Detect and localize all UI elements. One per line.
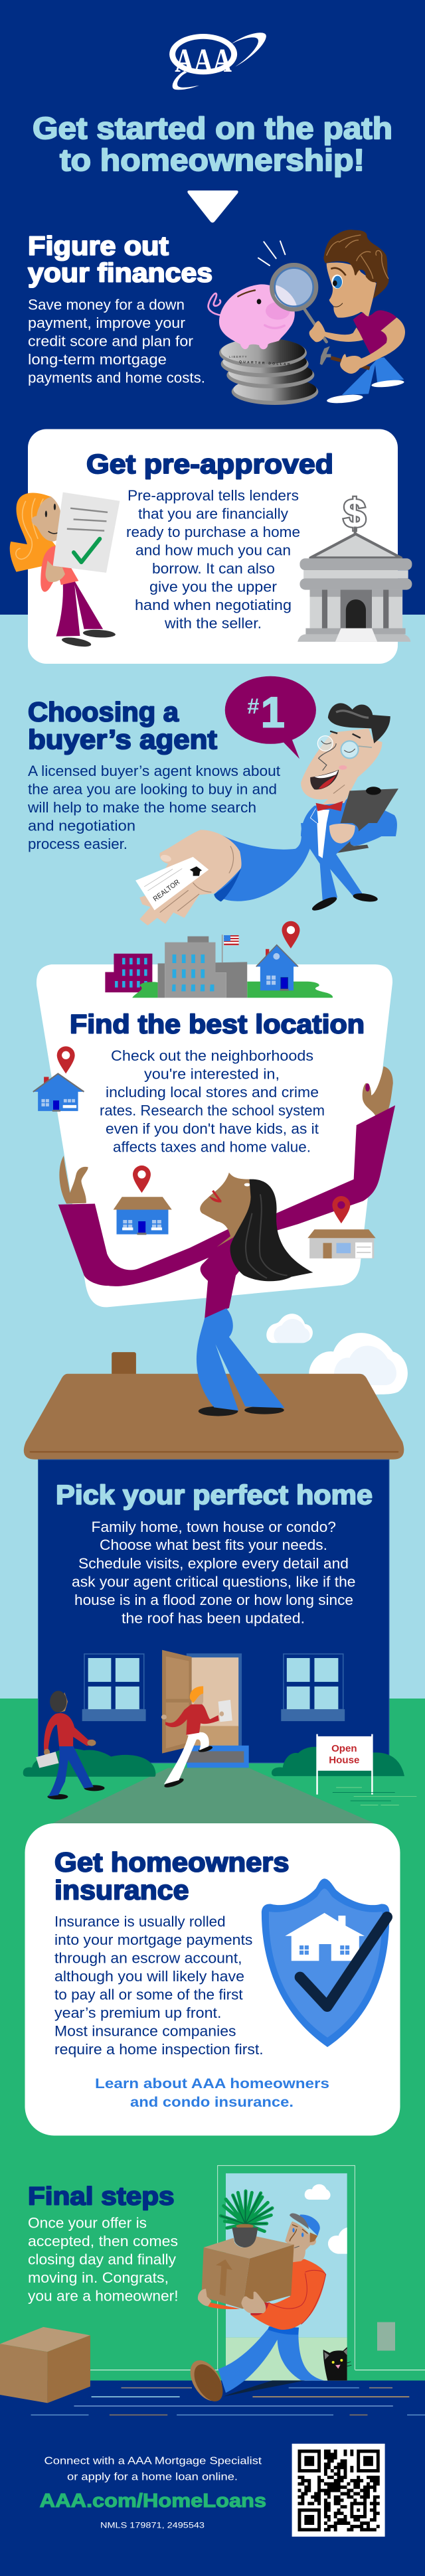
- text: pre-approval body: that you are financially: [138, 506, 288, 522]
- text: pre-approval body: hand when negotiating: [135, 597, 292, 613]
- speech bubble: #1: #: [247, 694, 259, 718]
- panel: find the best location: [37, 964, 392, 1307]
- heading: final steps: Final steps: [28, 2183, 174, 2211]
- icon: legs and shoe: [184, 2326, 324, 2407]
- link text: learn about insurance: [95, 2076, 329, 2110]
- icon: cat: [323, 2347, 351, 2381]
- heading: figure out your finances: [28, 232, 212, 288]
- text: pre-approval body: give you the upper: [149, 579, 277, 595]
- heading: figure out your finances: your finances: [28, 259, 212, 288]
- icon: shield with house and check: [262, 1878, 390, 2047]
- icon: woman's head and hair: [200, 1173, 313, 1281]
- icon: garage house with pin: [307, 1196, 376, 1258]
- icon: coin stack: LIBERTY: [229, 355, 247, 358]
- panel: pick your perfect home (house wall): [39, 1460, 389, 1763]
- text: buyer's agent body: process easier.: [28, 836, 128, 852]
- figure: woman entering: [161, 1686, 232, 1789]
- figure: man: [309, 230, 405, 404]
- figure: woman's legs on roof: [197, 1308, 285, 1416]
- heading: get pre-approved: Get pre-approved: [86, 449, 333, 479]
- text: insurance body: into your mortgage payments: [54, 1932, 252, 1948]
- background: navy top: [0, 0, 425, 615]
- text: pre-approval body: [126, 487, 300, 632]
- footer: call to action: [40, 2456, 266, 2530]
- text: perfect home body: house is in a flood zone or how long since: [74, 1592, 353, 1608]
- text: insurance body: Most insurance companies: [54, 2023, 236, 2039]
- icon: box carried: [201, 2236, 294, 2309]
- link text: learn about insurance: Learn about AAA homeowners: [95, 2076, 329, 2091]
- figure: man with paper: [36, 1691, 105, 1799]
- text: finances body: credit score and plan for: [28, 333, 193, 349]
- icon: woman's arms: [58, 1067, 395, 1318]
- text: final steps body: you are a homeowner!: [28, 2287, 179, 2305]
- figure: woman holding approved document: [10, 492, 120, 648]
- text: final steps body: moving in. Congrats,: [28, 2269, 169, 2286]
- icon: left bush: [23, 1748, 155, 1777]
- icon: school with flag: [158, 935, 247, 998]
- text: buyer's agent body: [27, 763, 280, 852]
- text: location body: Check out the neighborhoods: [111, 1047, 313, 1064]
- heading: pick your perfect home: Pick your perfect home: [56, 1479, 373, 1510]
- roof: [24, 1352, 404, 1460]
- clouds: [266, 1314, 408, 1395]
- icon: coin stack: QUARTER DOLLAR: [239, 360, 290, 367]
- figure: mover carrying box through doorway: [184, 2166, 355, 2407]
- text: location body: including local stores and crime: [106, 1084, 319, 1100]
- text: pre-approval body: Pre-approval tells lenders: [128, 487, 299, 504]
- heading: find the best location: Find the best location: [70, 1010, 365, 1039]
- icon: sweater: [208, 2259, 326, 2330]
- icon: apartment building: [105, 954, 152, 992]
- heading: choosing a buyer's agent: Choosing a: [28, 697, 179, 727]
- text: finances body: long-term mortgage: [28, 351, 167, 368]
- AAA logo: AAA: [175, 42, 232, 80]
- sign: open house: [317, 1734, 372, 1795]
- icon: plant: [220, 2191, 272, 2247]
- text: insurance body: to pay all or some of the first: [54, 1986, 243, 2003]
- illustration: house front with open door and people: [23, 1650, 416, 1823]
- text: buyer's agent body: the area you are looking to buy in and: [28, 781, 277, 798]
- title: [33, 111, 392, 177]
- icon: blue house with pin: [256, 921, 299, 991]
- icon: doorway: [218, 2166, 355, 2381]
- sign: open house: Open: [331, 1743, 357, 1754]
- figure: agent arm, business card and legs: REALTOR: [151, 878, 181, 903]
- background: sky: [0, 615, 425, 1699]
- icon: left window: [82, 1654, 146, 1721]
- figure: woman holding up neighborhood sign: [33, 1046, 395, 1318]
- icon: doorway and door: [162, 1650, 249, 1768]
- heading: get homeowners insurance: insurance: [54, 1875, 189, 1906]
- speech bubble: #1: 1: [261, 688, 285, 737]
- illustration: wall details and floor: [0, 2322, 425, 2415]
- AAA logo: [169, 33, 266, 90]
- text: url: AAA.com/HomeLoans: [40, 2490, 266, 2512]
- heading: choosing a buyer's agent: buyer’s agent: [28, 724, 217, 755]
- icon: house with pin left: [33, 1046, 84, 1112]
- text: final steps body: closing day and finally: [28, 2251, 176, 2267]
- text: NMLS: NMLS 179871, 2495543: [100, 2521, 205, 2530]
- floor lines: [31, 2388, 425, 2415]
- heading: get homeowners insurance: Get homeowners: [54, 1847, 290, 1878]
- icon: magnifying glass: [258, 241, 327, 342]
- floor shadow: [224, 2380, 305, 2397]
- figure: agent upper body: [301, 703, 398, 836]
- text: insurance body: although you will likely have: [54, 1968, 244, 1985]
- text: final steps body: accepted, then comes: [28, 2233, 178, 2249]
- icon: house with pin center: [114, 1166, 172, 1235]
- icon: moving box on floor: [0, 2327, 90, 2403]
- text: perfect home body: Choose what best fits your needs.: [100, 1537, 327, 1553]
- icon: right window: [281, 1654, 345, 1721]
- text: connect with specialist: or apply for a home loan online.: [67, 2472, 238, 2482]
- title: Get started on the path: [33, 111, 392, 145]
- icon: bank: [298, 491, 412, 642]
- text: finances body: Save money for a down: [28, 296, 185, 313]
- text: insurance body: Insurance is usually rolled: [54, 1913, 226, 1930]
- heading: choosing a buyer's agent: [28, 697, 217, 755]
- text: finances body: payment, improve your: [28, 315, 185, 331]
- text: insurance body: year’s premium up front.: [54, 2005, 222, 2021]
- text: connect with specialist: Connect with a AAA Mortgage Specialist: [44, 2456, 262, 2466]
- text: buyer's agent body: will help to make the home search: [27, 799, 256, 816]
- title: to homeownership!: [60, 143, 365, 177]
- text: finances body: [28, 296, 205, 386]
- text: location body: [100, 1047, 325, 1155]
- text: pre-approval body: borrow. It can also: [152, 560, 275, 577]
- text: insurance body: [54, 1913, 264, 2058]
- text: pre-approval body: ready to purchase a home: [126, 524, 300, 540]
- text: connect with specialist: [44, 2456, 262, 2482]
- text: final steps body: Once your offer is: [28, 2214, 147, 2232]
- background: green lawn and wall: [0, 1699, 425, 2381]
- text: perfect home body: Family home, town house or condo?: [92, 1519, 336, 1535]
- text: location body: affects taxes and home value.: [113, 1139, 311, 1155]
- text: insurance body: require a home inspection first.: [54, 2041, 264, 2058]
- panel: get pre-approved: [28, 429, 398, 664]
- sign: open house: House: [329, 1754, 359, 1766]
- text: buyer's agent body: A licensed buyer’s agent knows about: [28, 763, 280, 779]
- text: insurance body: through an escrow account,: [54, 1950, 242, 1966]
- illustration: neighborhood buildings: [105, 921, 333, 998]
- panel: get homeowners insurance: [25, 1823, 400, 2136]
- text: perfect home body: the roof has been updated.: [122, 1610, 305, 1626]
- icon: coin stack: [219, 339, 318, 405]
- link text: learn about insurance: and condo insurance.: [130, 2095, 294, 2110]
- text: location body: even if you don't have kids, as it: [106, 1120, 319, 1137]
- text: final steps body: [28, 2214, 179, 2305]
- text: perfect home body: Schedule visits, explore every detail and: [78, 1555, 349, 1572]
- icon: right bush: [272, 1747, 404, 1776]
- background: navy floor: [0, 2380, 425, 2576]
- text: buyer's agent body: and negotiation: [28, 818, 135, 834]
- icon: piggy bank: [209, 284, 295, 349]
- icon: head with cap: [285, 2213, 320, 2262]
- text: location body: you're interested in,: [144, 1066, 280, 1082]
- icon: hands: [198, 2289, 266, 2313]
- text: pre-approval body: and how much you can: [135, 542, 291, 559]
- text: perfect home body: [72, 1519, 356, 1626]
- QR code: [292, 2444, 385, 2537]
- speech bubble: #1: [225, 676, 316, 759]
- icon: light switch: [377, 2322, 395, 2351]
- heading: figure out your finances: Figure out: [28, 232, 169, 261]
- icon: walkway: [53, 1768, 374, 1823]
- icon: lawn: [132, 982, 333, 998]
- arrow: down triangle: [187, 190, 238, 223]
- text: pre-approval body: with the seller.: [164, 615, 262, 632]
- text: finances body: payments and home costs.: [28, 369, 205, 386]
- text: location body: rates. Research the school system: [100, 1102, 325, 1119]
- icon: bank: $: [343, 491, 366, 536]
- text: perfect home body: ask your agent critical questions, like if the: [72, 1573, 356, 1590]
- heading: get homeowners insurance: [54, 1847, 290, 1906]
- figure: agent arm, business card and legs: [135, 823, 396, 925]
- illustration: man inspecting piggy bank on coins: [209, 230, 405, 405]
